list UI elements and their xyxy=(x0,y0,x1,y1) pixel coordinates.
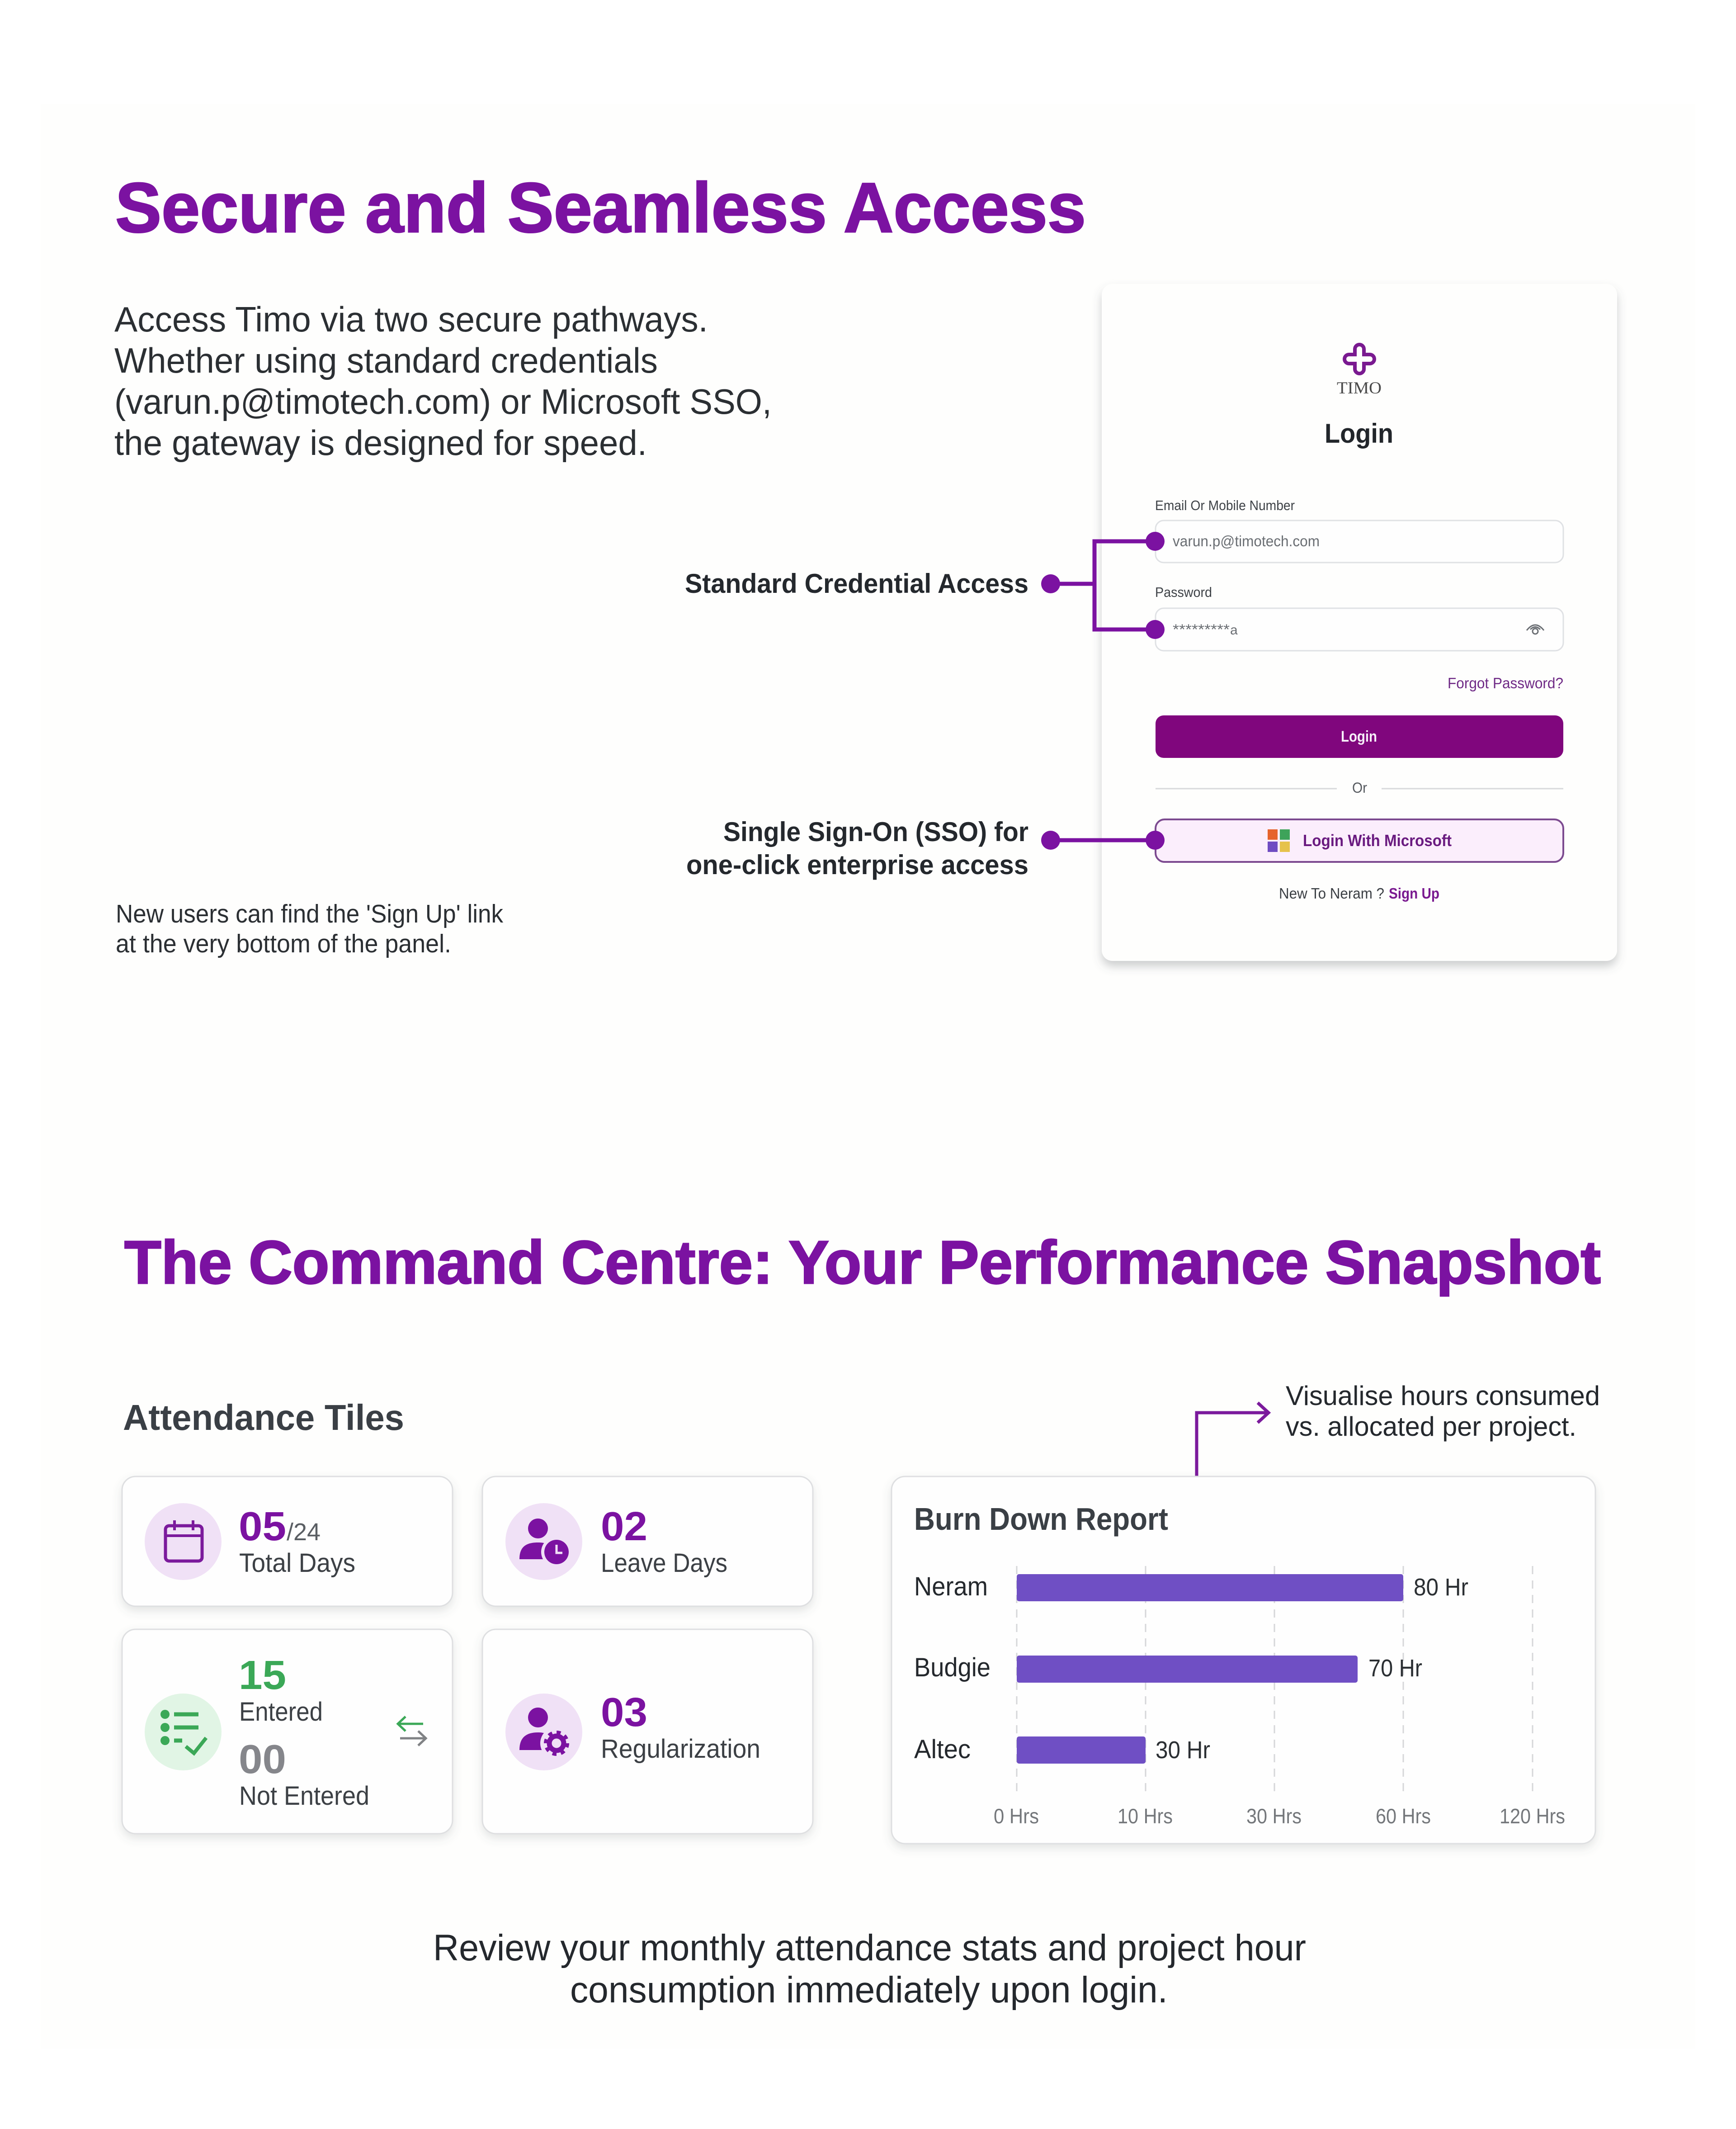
icon: checklist xyxy=(145,1694,222,1770)
stat: 15 entered: Entered xyxy=(239,1697,323,1727)
stat: 02: 02 xyxy=(601,1504,647,1549)
sign up prompt: Sign Up xyxy=(1389,885,1439,902)
sign up prompt: New To Neram ? xyxy=(1279,885,1384,902)
arrow: burn down callout xyxy=(1197,1403,1269,1476)
x axis labels: 30 Hrs xyxy=(1246,1804,1302,1828)
sign-up note xyxy=(116,899,503,958)
password field: a xyxy=(1230,623,1238,638)
chart heading: Burn Down Report xyxy=(914,1501,1168,1537)
stat: 15 entered: 15 xyxy=(239,1653,286,1698)
intro text block: Whether using standard credentials xyxy=(114,341,658,380)
x axis labels xyxy=(994,1804,1565,1828)
bar: Neram: 80 Hr xyxy=(1414,1574,1468,1601)
bar: Budgie: Budgie xyxy=(914,1653,991,1682)
bar chart xyxy=(914,1566,1565,1828)
login button xyxy=(1156,715,1563,758)
intro text block: (varun.p@timotech.com) or Microsoft SSO, xyxy=(114,382,772,421)
stat: 03: 03 xyxy=(601,1690,647,1735)
label: Regularization: Regularization xyxy=(601,1734,760,1764)
callout: single sign-on: one-click enterprise access xyxy=(686,850,1028,880)
intro text block: Access Timo via two secure pathways. xyxy=(114,299,708,339)
callout text: visualise hours xyxy=(1286,1381,1600,1442)
panel: entered tile xyxy=(122,1629,453,1834)
panel: total days tile xyxy=(122,1476,453,1606)
callout: standard credential access: Standard Credential Access xyxy=(685,568,1028,599)
icon: microsoft squares xyxy=(1268,829,1290,852)
login button: Login xyxy=(1341,728,1377,745)
x axis labels: 0 Hrs xyxy=(994,1804,1039,1828)
icon: Timo logo: TIMO xyxy=(1337,379,1382,397)
bar: Budgie xyxy=(914,1653,1422,1683)
panel: login card xyxy=(1102,284,1617,961)
icon: calendar xyxy=(145,1503,222,1580)
stat: 00 not entered: Not Entered xyxy=(239,1781,369,1811)
icon: person with gear xyxy=(505,1694,582,1770)
bar: Altec: Altec xyxy=(914,1735,971,1764)
x axis labels: 120 Hrs xyxy=(1500,1804,1565,1828)
sign-up note: at the very bottom of the panel. xyxy=(116,929,451,958)
callout: single sign-on: Single Sign-On (SSO) for xyxy=(723,817,1028,847)
x axis labels: 10 Hrs xyxy=(1118,1804,1173,1828)
bar: Neram xyxy=(914,1572,1468,1601)
callout: standard credential access xyxy=(685,532,1165,639)
icon: swap arrows xyxy=(398,1717,426,1746)
stat: 00 not entered: 00 xyxy=(239,1737,286,1782)
stat: 05/24: 05 xyxy=(239,1504,286,1549)
intro text block: the gateway is designed for speed. xyxy=(114,423,647,463)
icon: eye xyxy=(1527,625,1544,634)
bar: Altec xyxy=(914,1735,1210,1764)
forgot password link: Forgot Password? xyxy=(1448,675,1563,691)
panel: leave days tile xyxy=(482,1476,813,1606)
title: The Command Centre: The Command Centre: Your Performance Snapshot xyxy=(124,1228,1601,1296)
email field xyxy=(1155,497,1563,563)
closing text block: Review your monthly attendance stats and project hour xyxy=(433,1927,1306,1968)
x axis labels: 60 Hrs xyxy=(1376,1804,1431,1828)
icon: Timo logo xyxy=(1337,345,1382,397)
callout text: visualise hours: vs. allocated per project. xyxy=(1286,1411,1576,1442)
callout text: visualise hours: Visualise hours consumed xyxy=(1286,1381,1600,1411)
closing text block: consumption immediately upon login. xyxy=(570,1969,1168,2011)
callout: single sign-on xyxy=(686,817,1165,880)
email field: Email Or Mobile Number xyxy=(1155,497,1295,513)
icon: person with clock xyxy=(505,1503,582,1580)
stat: 05/24: /24 xyxy=(287,1519,321,1546)
panel: regularization tile xyxy=(482,1629,813,1834)
stat: 00 not entered xyxy=(239,1737,369,1811)
bar: Neram: Neram xyxy=(914,1572,988,1601)
heading: Attendance Tiles: Attendance Tiles xyxy=(123,1397,404,1438)
microsoft login button xyxy=(1156,819,1563,862)
sign up prompt xyxy=(1279,885,1439,902)
stat: 05/24 xyxy=(239,1504,321,1549)
stat: 15 entered xyxy=(239,1653,323,1727)
label: Leave Days: Leave Days xyxy=(601,1548,727,1578)
password field xyxy=(1155,584,1563,651)
microsoft login button: Login With Microsoft xyxy=(1303,831,1452,850)
email field: varun.p@timotech.com xyxy=(1173,533,1320,549)
password field: Password xyxy=(1155,584,1212,600)
bar: Altec: 30 Hr xyxy=(1156,1736,1210,1764)
closing text block xyxy=(433,1927,1306,2011)
bar: Budgie: 70 Hr xyxy=(1368,1655,1422,1682)
panel: burn down report xyxy=(892,1476,1595,1844)
intro text block xyxy=(114,299,772,463)
password field: ********* xyxy=(1173,621,1230,638)
or divider: Or xyxy=(1352,780,1367,796)
sign-up note: New users can find the 'Sign Up' link xyxy=(116,899,503,928)
label: Total Days: Total Days xyxy=(239,1548,355,1578)
login heading: Login xyxy=(1325,418,1393,449)
title: Secure and Seamless Access: Secure and Seamless Access xyxy=(115,169,1086,247)
